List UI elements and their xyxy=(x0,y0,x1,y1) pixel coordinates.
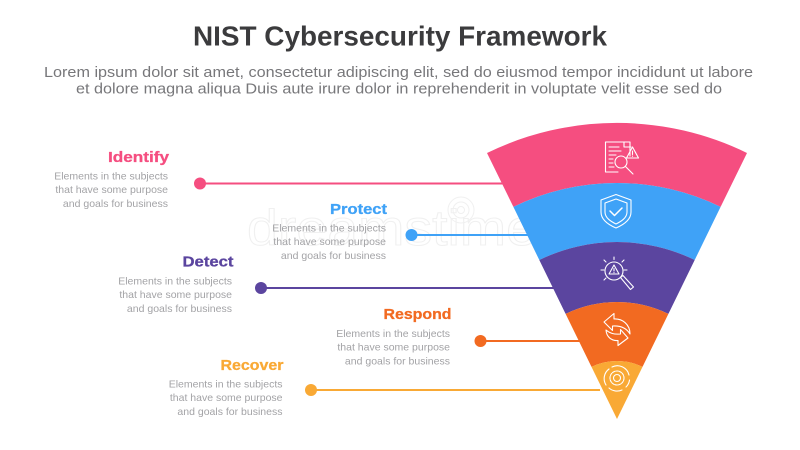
Recover description: Elements in the subjects xyxy=(169,378,282,390)
segment: Protect xyxy=(513,183,721,260)
segment: Respond xyxy=(566,302,668,367)
icon: document with magnifier and warning xyxy=(606,142,638,174)
icon: shield with check xyxy=(601,194,631,228)
Protect description: Elements in the subjects xyxy=(272,222,386,234)
Identify heading: Identify xyxy=(108,149,170,166)
Recover connector xyxy=(305,384,600,396)
item: Identify xyxy=(54,149,510,210)
item: Respond xyxy=(336,306,584,368)
icon: two circular arrows xyxy=(604,314,630,346)
segment: Detect xyxy=(539,242,695,314)
Recover description: and goals for business xyxy=(177,406,282,418)
item: Protect xyxy=(272,201,530,262)
Protect description: that have some purpose xyxy=(273,236,386,248)
subtitle: et dolore magna aliqua Duis aute irure dolor in reprehenderit in voluptate velit esse sed do xyxy=(76,80,722,98)
Identify description: and goals for business xyxy=(63,198,168,210)
Detect connector xyxy=(255,282,558,294)
Protect heading: Protect xyxy=(330,201,387,218)
title: NIST Cybersecurity Framework xyxy=(193,20,607,52)
Protect connector xyxy=(406,229,530,241)
icon: gear with cycle xyxy=(604,366,630,391)
item: Detect xyxy=(118,254,558,315)
Detect heading: Detect xyxy=(182,254,234,270)
Respond description: and goals for business xyxy=(345,356,450,368)
watermark: dreamstime xyxy=(247,200,537,256)
icon: magnifier with warning target xyxy=(601,257,634,290)
item: Recover xyxy=(169,357,600,418)
Respond description: that have some purpose xyxy=(337,342,450,354)
Detect description: and goals for business xyxy=(127,303,232,315)
Protect description: and goals for business xyxy=(281,250,386,262)
Identify description: Elements in the subjects xyxy=(54,170,168,182)
subtitle: Lorem ipsum dolor sit amet, consectetur adipiscing elit, sed do eiusmod tempor incididunt ut labore xyxy=(44,64,753,81)
Respond heading: Respond xyxy=(384,306,452,323)
Detect description: that have some purpose xyxy=(119,289,232,301)
subtitle xyxy=(44,64,753,98)
Identify description: that have some purpose xyxy=(55,184,168,196)
Recover heading: Recover xyxy=(220,357,284,374)
Identify connector xyxy=(194,178,510,190)
Recover description: that have some purpose xyxy=(170,392,283,404)
Detect description: Elements in the subjects xyxy=(118,276,232,288)
segment: Recover xyxy=(592,361,642,419)
Respond connector xyxy=(474,335,584,347)
funnel chart xyxy=(487,123,747,419)
Respond description: Elements in the subjects xyxy=(336,328,450,340)
segment: Identify xyxy=(487,123,747,207)
